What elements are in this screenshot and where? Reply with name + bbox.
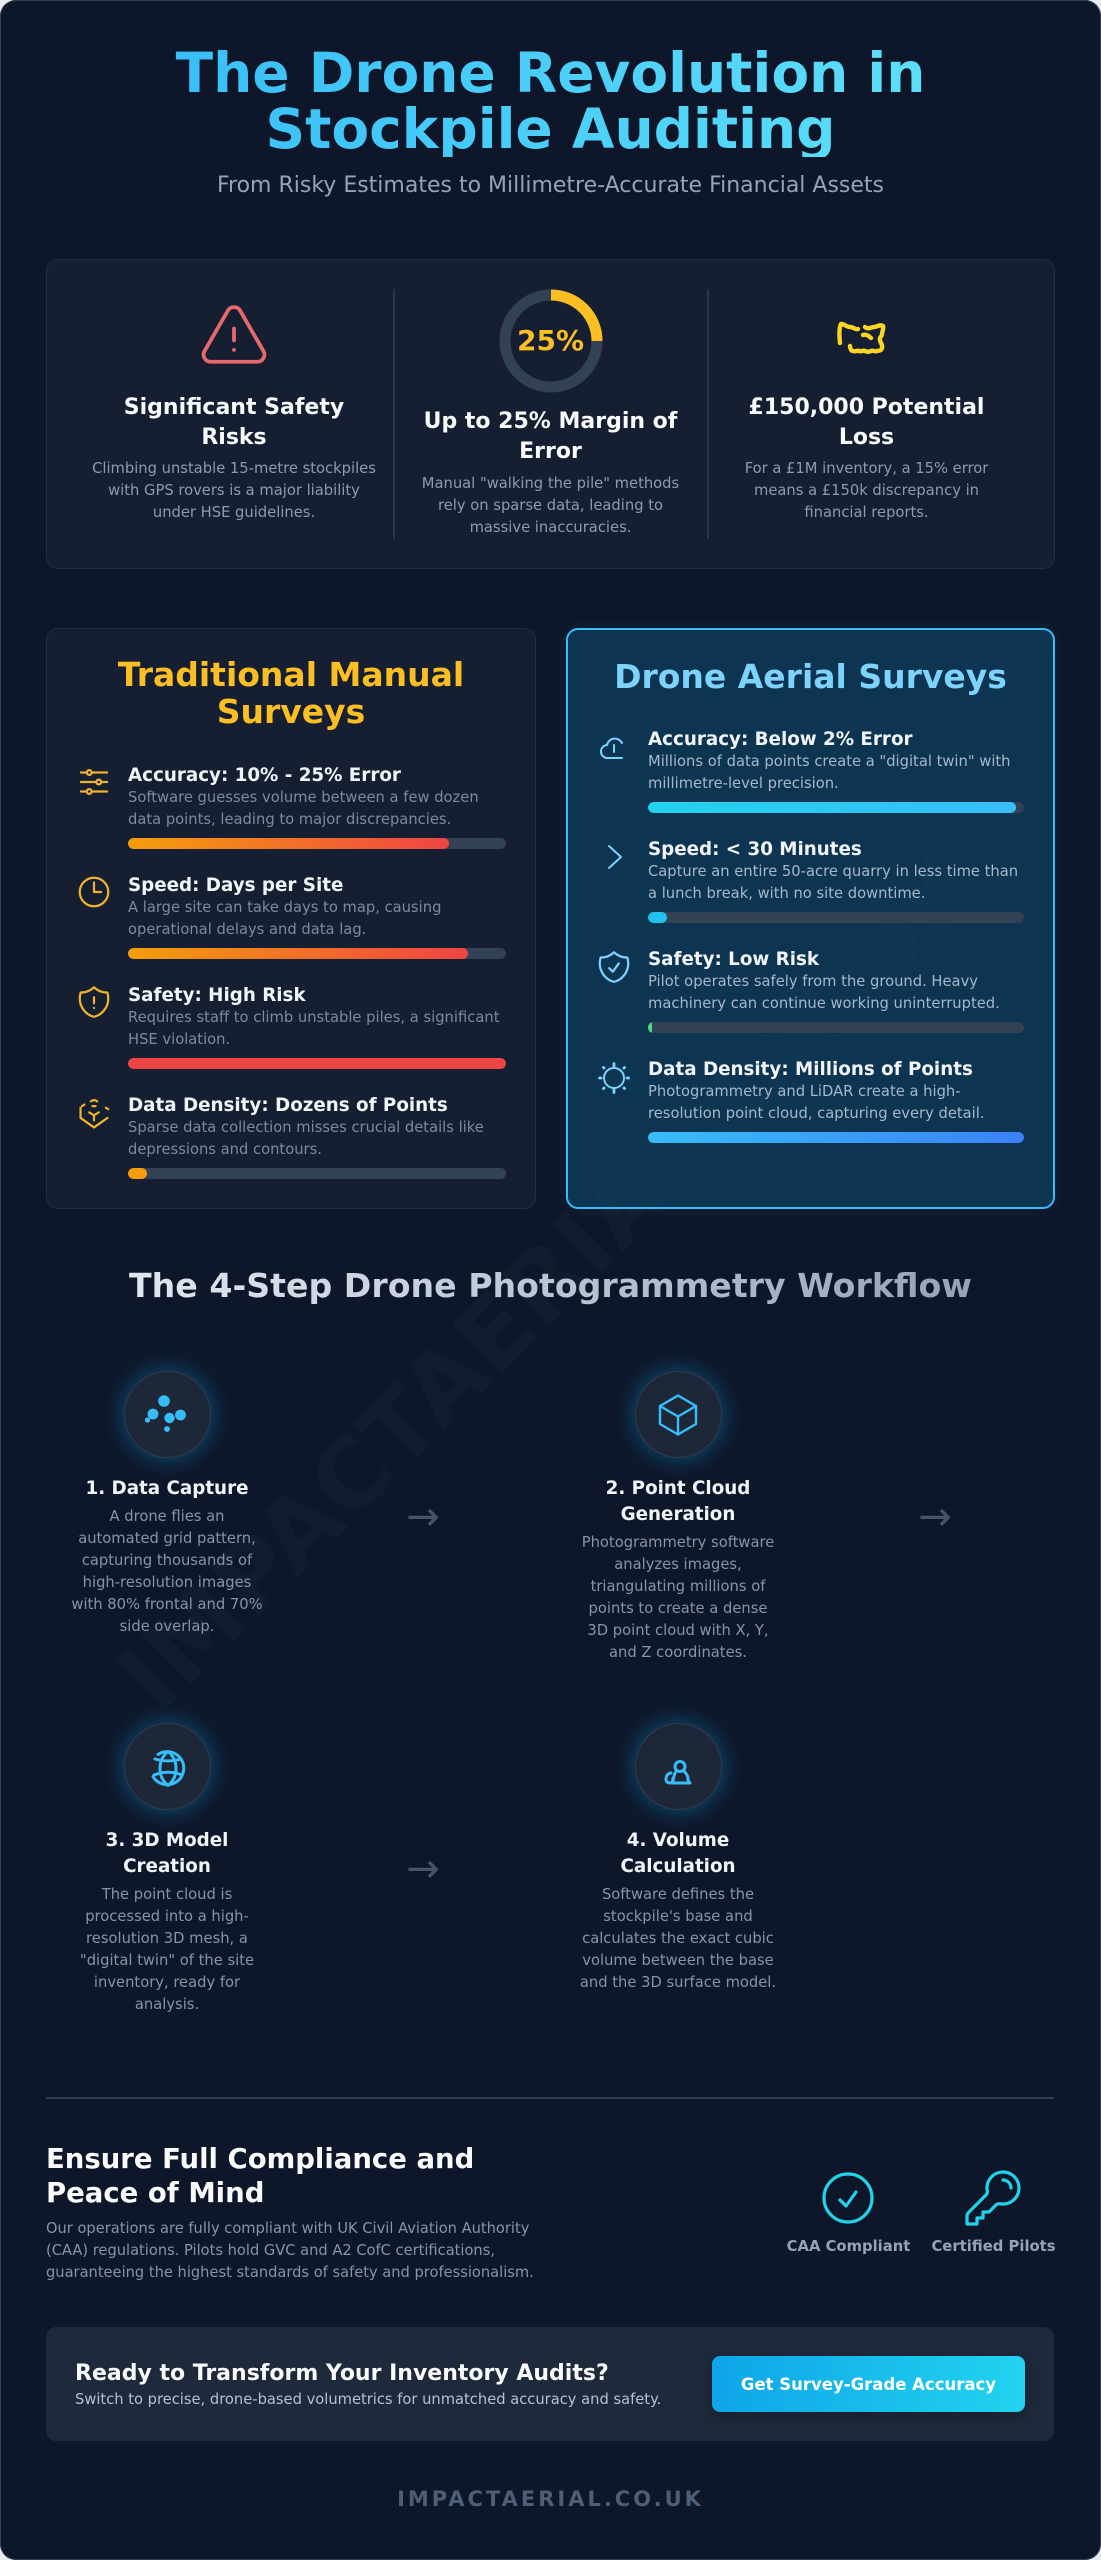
icon: sparse cube [79, 1099, 110, 1129]
title: Stockpile Auditing [265, 96, 836, 160]
step description: high-resolution images [83, 1574, 251, 1591]
row: data density manual [79, 1094, 506, 1179]
step title: Generation [621, 1504, 735, 1524]
bar [128, 838, 506, 849]
step title [558, 1476, 798, 1528]
bar [648, 1132, 1024, 1143]
stat heading: Error [519, 439, 582, 464]
step 4 [578, 1723, 778, 1963]
bar [128, 1168, 506, 1179]
step description: inventory, ready for [94, 1974, 240, 1991]
row description: Software guesses volume between a few dozen [128, 789, 479, 806]
row description [648, 1083, 985, 1122]
row description: resolution point cloud, capturing every detail. [648, 1105, 985, 1122]
step description: points to create a dense [589, 1600, 767, 1617]
row description: operational delays and data lag. [128, 921, 366, 938]
stat heading: Up to 25% Margin of [424, 409, 677, 434]
title [150, 46, 951, 157]
call to action panel [46, 2327, 1054, 2441]
stat description: Climbing unstable 15-metre stockpiles [92, 460, 376, 477]
step title: 1. Data Capture [86, 1478, 248, 1498]
CTA button: Get Survey-Grade Accuracy [741, 2375, 996, 2394]
step title: Calculation [620, 1856, 736, 1876]
row description: Photogrammetry and LiDAR create a high- [648, 1083, 961, 1100]
row: safety drone [598, 948, 1024, 1033]
compliance text: guaranteeing the highest standards of safety and professionalism. [46, 2264, 534, 2280]
step 1 [71, 1358, 263, 1635]
stat heading [124, 395, 344, 450]
title: The Drone Revolution in [176, 41, 925, 105]
stat: potential loss [745, 322, 988, 521]
stat heading: Loss [839, 425, 894, 450]
row title: Safety: Low Risk [648, 948, 819, 970]
step description: resolution 3D mesh, a [86, 1930, 248, 1947]
row description: a lunch break, with no site downtime. [648, 885, 925, 902]
row description: data points, leading to major discrepancies. [128, 811, 451, 828]
subtitle: From Risky Estimates to Millimetre-Accurate Financial Assets [217, 173, 884, 198]
CTA button [712, 2356, 1025, 2412]
row description: A large site can take days to map, causing [128, 899, 441, 916]
arrow: → [918, 1494, 952, 1540]
footer website: IMPACTAERIAL.CO.UK [397, 2487, 704, 2511]
icon: person volume [654, 1743, 702, 1791]
stat heading: Significant Safety [124, 395, 344, 420]
row description: Sparse data collection misses crucial details like [128, 1119, 484, 1136]
section divider [46, 2097, 1054, 2099]
panel: traditional manual surveys [46, 628, 536, 1209]
row description: Pilot operates safely from the ground. Heavy [648, 973, 978, 990]
stat description: rely on sparse data, leading to [438, 497, 663, 514]
panel heading: traditional [118, 655, 464, 731]
step description [47, 1884, 287, 2016]
compliance heading: Ensure Full Compliance and [46, 2143, 474, 2175]
panel: drone aerial surveys [566, 628, 1055, 1209]
icon circle [124, 1723, 210, 1810]
compliance heading: Peace of Mind [46, 2176, 264, 2208]
stat heading [749, 395, 984, 450]
bar [648, 912, 1024, 923]
stat description [92, 460, 376, 521]
compliance text: (CAA) regulations. Pilots hold GVC and A2 CofC certifications, [46, 2242, 495, 2258]
row description: HSE violation. [128, 1031, 230, 1048]
panel heading: drone: Drone Aerial Surveys [614, 657, 1007, 696]
step description [558, 1884, 798, 1994]
bar [128, 1058, 506, 1069]
CTA heading: Ready to Transform Your Inventory Audits? [75, 2361, 609, 2386]
icon: chevron [608, 845, 622, 869]
icon circle [634, 1723, 722, 1810]
stat heading [424, 409, 678, 464]
step description: volume between the base [582, 1952, 774, 1969]
icon: banknote [837, 322, 886, 354]
panel heading: traditional: Traditional Manual [118, 655, 464, 694]
icon: warning triangle [202, 305, 266, 364]
step description: automated grid pattern, [78, 1530, 256, 1547]
step description: analysis. [135, 1996, 199, 2013]
row description: Millions of data points create a "digital twin" with [648, 753, 1011, 770]
stat: safety risks [92, 305, 376, 521]
step description: side overlap. [120, 1618, 214, 1635]
stat description [422, 475, 679, 536]
stat description: massive inaccuracies. [470, 519, 631, 536]
row description [128, 1119, 484, 1158]
row description [648, 973, 1000, 1012]
stat heading: £150,000 Potential [749, 395, 984, 420]
row: data density drone [598, 1058, 1024, 1143]
column divider [393, 289, 395, 539]
row title: Speed: Days per Site [128, 874, 343, 896]
row title: Accuracy: Below 2% Error [648, 728, 913, 750]
row description [648, 753, 1011, 792]
step 3 [67, 1723, 267, 1963]
CTA text: Switch to precise, drone-based volumetrics for unmatched accuracy and safety. [75, 2390, 661, 2408]
icon: globe [144, 1744, 192, 1792]
step description: A drone flies an [110, 1508, 224, 1525]
icon: shield warning [78, 986, 110, 1018]
step 2 [578, 1371, 778, 1611]
column divider [707, 289, 709, 539]
row title: Accuracy: 10% - 25% Error [128, 764, 401, 786]
bar [648, 802, 1024, 813]
badge label: Certified Pilots [931, 2238, 1056, 2254]
icon: cloud [600, 738, 623, 759]
step description [558, 1532, 798, 1664]
step description: 3D point cloud with X, Y, [587, 1622, 769, 1639]
step description: capturing thousands of [82, 1552, 252, 1569]
panel: key problem stats [46, 259, 1055, 569]
step description: analyzes images, [614, 1556, 742, 1573]
icon circle [634, 1371, 722, 1458]
row description: machinery can continue working uninterrupted. [648, 995, 1000, 1012]
step title: 4. Volume [627, 1830, 729, 1850]
stat description: means a £150k discrepancy in [754, 482, 979, 499]
row description: depressions and contours. [128, 1141, 322, 1158]
icon: sun point cloud [598, 1062, 630, 1094]
ring chart: 25% [500, 290, 602, 392]
badge: CAA compliant [787, 2166, 911, 2256]
step title [47, 1828, 287, 1880]
step description: stockpile's base and [603, 1908, 753, 1925]
compliance heading [46, 2143, 474, 2210]
step description: with 80% frontal and 70% [71, 1596, 263, 1613]
stat description: with GPS rovers is a major liability [108, 482, 360, 499]
row description [128, 789, 479, 828]
step description: calculates the exact cubic [582, 1930, 774, 1947]
row description: Capture an entire 50-acre quarry in less time than [648, 863, 1018, 880]
stat description [745, 460, 988, 521]
row description [128, 899, 441, 938]
step description: "digital twin" of the site [80, 1952, 254, 1969]
badge label: CAA Compliant [787, 2238, 910, 2254]
arrow: → [406, 1494, 440, 1540]
icon: shield check [598, 951, 630, 983]
stat description: financial reports. [804, 504, 929, 521]
stat: margin of error [422, 290, 679, 536]
stat description: Manual "walking the pile" methods [422, 475, 679, 492]
step title [558, 1828, 798, 1880]
row: speed drone [608, 838, 1024, 923]
icon circle [124, 1371, 210, 1458]
step description: processed into a high- [85, 1908, 249, 1925]
icon: clock [78, 876, 110, 908]
compliance text: Our operations are fully compliant with UK Civil Aviation Authority [46, 2220, 529, 2236]
row description: millimetre-level precision. [648, 775, 839, 792]
watermark: IMPACTAERIAL.CO.UK [95, 823, 1005, 1733]
icon: key [961, 2166, 1025, 2230]
row: speed manual [78, 874, 506, 959]
row description [128, 1009, 500, 1048]
row title: Speed: < 30 Minutes [648, 838, 862, 860]
step description: and Z coordinates. [609, 1644, 747, 1661]
icon: check circle [816, 2166, 880, 2230]
badge: certified pilots [932, 2166, 1056, 2256]
icon: sliders [80, 769, 108, 795]
icon: cube [654, 1391, 702, 1439]
step description: The point cloud is [102, 1886, 232, 1903]
step title: 2. Point Cloud [606, 1478, 750, 1498]
bar [128, 948, 506, 959]
step title: 3. 3D Model [106, 1830, 228, 1850]
row: accuracy manual [80, 764, 506, 849]
step description [71, 1508, 263, 1635]
row title: Safety: High Risk [128, 984, 306, 1006]
workflow heading: The 4-Step Drone Photogrammetry Workflow [129, 1266, 972, 1304]
row description [648, 863, 1018, 902]
panel heading: traditional: Surveys [217, 692, 365, 731]
ring value: 25% [517, 324, 584, 357]
arrow: → [406, 1846, 440, 1892]
bar [648, 1022, 1024, 1033]
step description: Photogrammetry software [582, 1534, 774, 1551]
row: accuracy drone [600, 728, 1024, 813]
step description: triangulating millions of [591, 1578, 765, 1595]
row description: Requires staff to climb unstable piles, a significant [128, 1009, 499, 1026]
row: safety manual [78, 984, 506, 1069]
compliance text [46, 2218, 534, 2284]
stat description: For a £1M inventory, a 15% error [745, 460, 988, 477]
stat heading: Risks [201, 425, 267, 450]
row title: Data Density: Dozens of Points [128, 1094, 448, 1116]
step description: Software defines the [602, 1886, 754, 1903]
step description: and the 3D surface model. [580, 1974, 776, 1991]
row title: Data Density: Millions of Points [648, 1058, 973, 1080]
icon: dots [144, 1395, 186, 1432]
step title: Creation [123, 1856, 211, 1876]
stat description: under HSE guidelines. [153, 504, 315, 521]
